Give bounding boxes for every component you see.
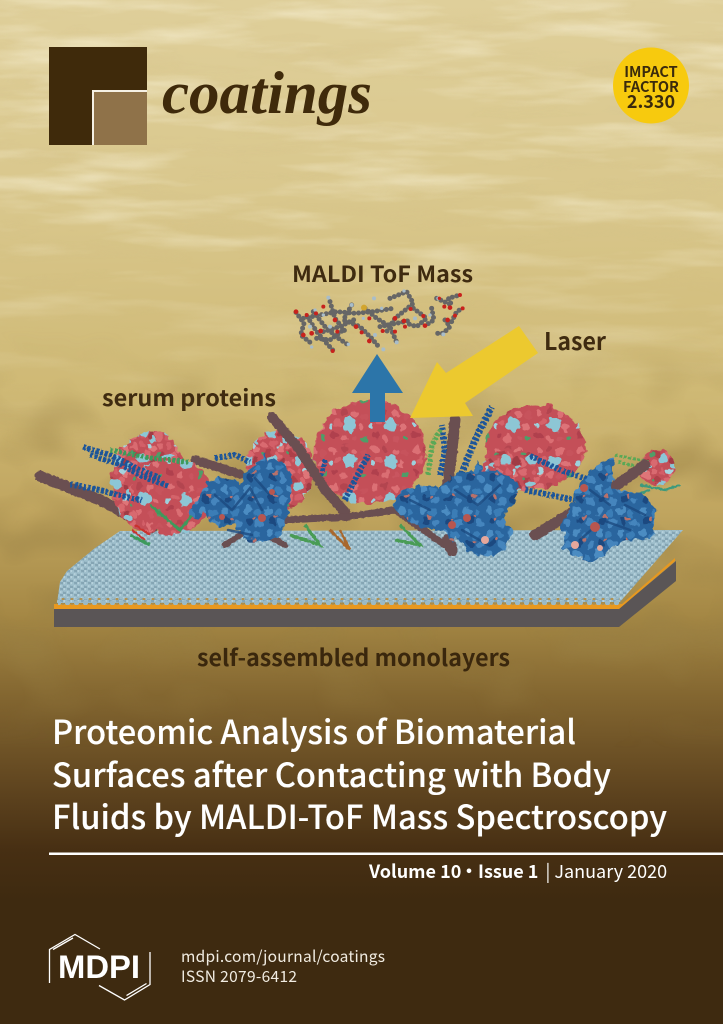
self-assembled monolayer surface	[57, 530, 683, 603]
label: MALDI ToF Mass: MALDI ToF Mass	[292, 257, 473, 289]
issue line: ·	[460, 858, 478, 884]
slab front and side faces	[54, 561, 676, 627]
journal logo mark	[49, 47, 147, 145]
blue protein contour shading	[215, 478, 645, 545]
issue line: Issue 1	[478, 858, 538, 884]
issue line: Volume 10	[368, 858, 461, 884]
label: self-assembled monolayers: self-assembled monolayers	[197, 639, 510, 673]
label: serum proteins: serum proteins	[102, 381, 276, 413]
substrate slab	[54, 530, 683, 627]
impact factor badge: IMPACT	[624, 61, 678, 82]
journal URL and ISSN: mdpi.com/journal/coatings	[181, 945, 385, 967]
impact factor badge	[613, 48, 689, 124]
helix strands	[70, 407, 680, 550]
label: Laser: Laser	[544, 322, 607, 357]
article title	[52, 706, 667, 839]
brown rod proteins front	[225, 417, 645, 550]
journal name: coatings	[162, 60, 372, 126]
impact factor badge: FACTOR	[623, 76, 679, 97]
MDPI logo	[50, 934, 150, 1000]
article title: Proteomic Analysis of Biomaterial	[52, 706, 576, 754]
MDPI wordmark: MDPI	[58, 949, 140, 985]
gold layer	[54, 558, 675, 609]
issue line: | January 2020	[546, 858, 667, 884]
journal URL and ISSN	[181, 945, 385, 987]
molecule: desorbed peptide	[294, 289, 465, 353]
red globular proteins	[112, 400, 675, 534]
arrow: yellow laser	[410, 326, 538, 418]
impact factor badge: 2.330	[627, 88, 675, 114]
divider rule	[49, 852, 723, 855]
journal URL and ISSN: ISSN 2079-6412	[181, 965, 297, 987]
article title: Surfaces after Contacting with Body	[52, 749, 611, 797]
blue globular proteins	[196, 458, 657, 564]
serum protein cluster	[40, 400, 680, 564]
article title: Fluids by MALDI-ToF Mass Spectroscopy	[52, 791, 667, 839]
hexagon outline	[50, 934, 150, 1000]
brown rod proteins behind	[40, 460, 240, 528]
arrow: blue upward	[352, 354, 403, 422]
